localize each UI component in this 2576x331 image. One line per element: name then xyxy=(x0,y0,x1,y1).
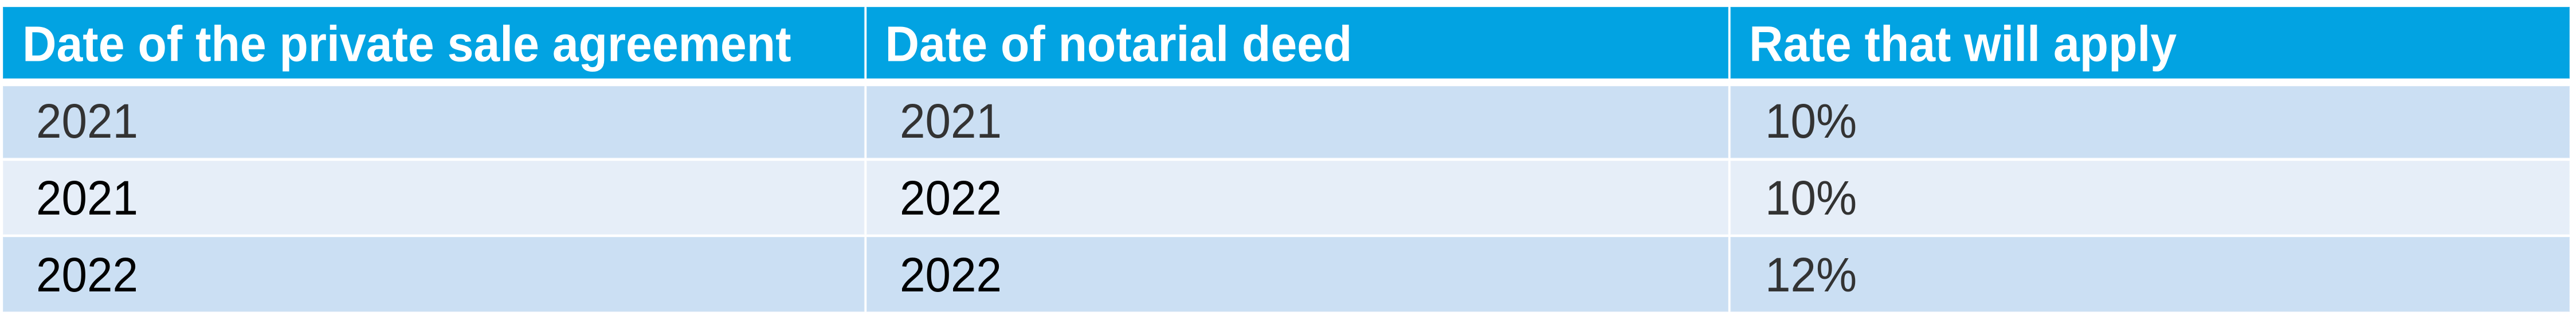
cell: 2022 notarial deed: 2022 xyxy=(900,171,1002,225)
header cell: date of notarial deed: Date of notarial deed xyxy=(885,15,1352,72)
cell: 2021 private sale xyxy=(3,86,864,158)
row 1 xyxy=(3,86,2570,158)
cell: 2021 private sale xyxy=(3,161,864,234)
cell: 2021 private sale: 2021 xyxy=(36,171,138,225)
cell: 10% rate: 10% xyxy=(1765,171,1857,225)
header cell: date of the private sale agreement: Date of the private sale agreement xyxy=(22,15,791,72)
cell: 2022 private sale: 2022 xyxy=(36,248,138,302)
cell: 2022 notarial deed: 2022 xyxy=(900,248,1002,302)
header cell: date of notarial deed xyxy=(866,7,1728,78)
cell: 12% rate xyxy=(1731,237,2570,311)
cell: 10% rate xyxy=(1731,86,2570,158)
cell: 2022 notarial deed xyxy=(866,161,1728,234)
cell: 2021 notarial deed: 2021 xyxy=(900,94,1002,149)
cell: 2021 notarial deed xyxy=(866,86,1728,158)
cell: 10% rate: 10% xyxy=(1765,94,1857,149)
cell: 2021 private sale: 2021 xyxy=(36,94,138,149)
header cell: rate that will apply: Rate that will apply xyxy=(1749,15,2177,72)
header cell: rate that will apply xyxy=(1731,7,2570,78)
cell: 12% rate: 12% xyxy=(1765,248,1857,302)
cell: 10% rate xyxy=(1731,161,2570,234)
cell: 2022 notarial deed xyxy=(866,237,1728,311)
cell: 2022 private sale xyxy=(3,237,864,311)
header row xyxy=(3,7,2570,78)
row 3 xyxy=(3,237,2570,311)
row 2 xyxy=(3,161,2570,234)
